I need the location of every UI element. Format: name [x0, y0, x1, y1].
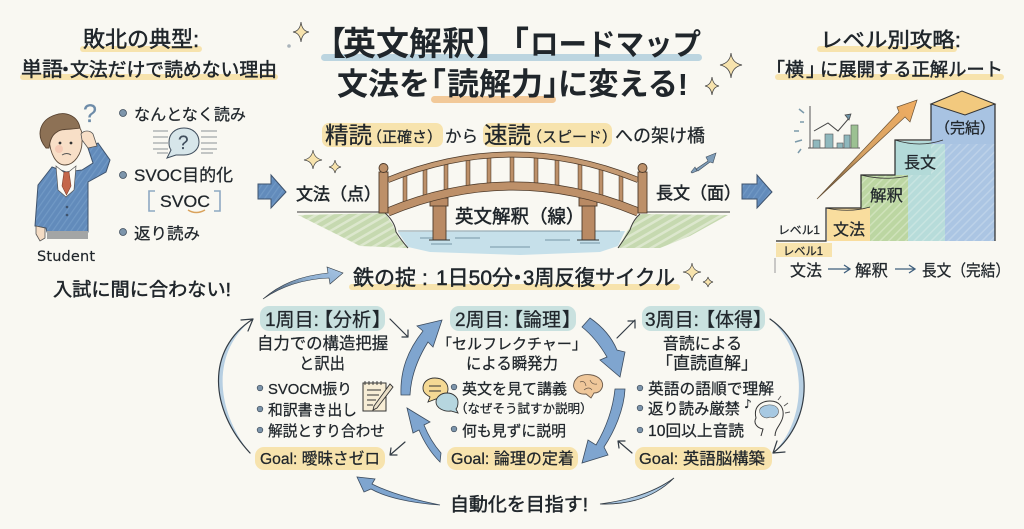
heading: defeat patterns: 文法だけで読めない理由 — [70, 59, 277, 81]
description: round 1 — [257, 335, 388, 373]
icon: music note: ♪ — [744, 397, 752, 411]
bullet: vague reading: なんとなく読み — [134, 106, 246, 124]
arrow: into cycle heading — [263, 267, 343, 299]
title: 英文解釈 — [343, 25, 475, 62]
route: grammar to long passage: 長文（完結） — [922, 262, 1010, 280]
pill: round 2: 2周目: — [455, 310, 509, 331]
title: 」 — [543, 67, 574, 102]
pill: round 2: 論理 — [523, 309, 561, 331]
bullet: back reading: 返り読み — [134, 225, 200, 243]
pill: round 1: 1周目: — [265, 310, 319, 331]
description: round 2: 「セルフレクチャー」 — [437, 336, 587, 353]
water — [398, 231, 625, 255]
pill: round 1: 】 — [372, 309, 391, 331]
title: 「 — [415, 67, 446, 102]
arrow: round 1 to round 2 thin — [390, 319, 408, 337]
bullets: round 2 — [451, 380, 593, 440]
description: round 3: 「直読直解」 — [656, 354, 758, 373]
pill: round 2 — [450, 306, 581, 331]
pill: round 3: 体得 — [715, 309, 753, 331]
subheading: bridge from intensive to speed reading: から — [445, 128, 478, 146]
bullets: round 2: 何も見ずに説明 — [462, 423, 566, 440]
arrow: goal 3 to automation — [600, 478, 674, 504]
label: interpretation step: 解釈 — [870, 187, 903, 205]
title: に変える! — [558, 67, 688, 102]
arrow: rising orange — [817, 100, 917, 199]
arrow: automation to goal 1 — [357, 477, 440, 505]
heading: defeat patterns: 単語 — [21, 58, 63, 81]
route: grammar to long passage: 文法 — [790, 262, 822, 280]
subheading: bridge from intensive to speed reading: 精読 — [325, 122, 372, 148]
pill: goal 1: Goal: 曖昧さゼロ — [260, 450, 380, 468]
bullets: round 1: 和訳書き出し — [268, 402, 357, 419]
heading: level strategy: 横 — [785, 59, 804, 81]
arrow: left panel to bridge — [258, 175, 286, 208]
heading: level strategy: に展開する正解ルート — [820, 59, 1003, 80]
label: level 1 highlighted: レベル1 — [783, 246, 823, 258]
panel: round 2 logic — [423, 306, 603, 470]
arrow: big to goal 2 — [582, 389, 625, 463]
heading: level strategy: 「 — [766, 59, 785, 81]
icon: bridge sparkles — [304, 150, 341, 173]
arrow: big from goal 2 — [407, 408, 441, 462]
arrow: round 3 down to goal 3 — [770, 319, 804, 453]
chart: mini bar chart — [794, 106, 860, 153]
bullet: SVOC as goal: SVOC目的化 — [134, 166, 233, 185]
subheading: bridge from intensive to speed reading: （スピード） — [527, 129, 617, 146]
panel: level strategy — [766, 29, 1010, 280]
arrow: toward goal 1 thin — [390, 442, 405, 455]
rail and deck — [388, 154, 638, 180]
heading: iron rule cycle — [349, 267, 680, 290]
heading: level strategy: 」 — [806, 60, 825, 81]
label: grammar (point): 文法（点） — [296, 185, 381, 204]
label: long passage (plane): 長文（面） — [656, 184, 741, 203]
heading: defeat patterns — [20, 27, 278, 81]
panel: round 3 mastery — [635, 306, 790, 470]
illustration: bridge — [297, 154, 730, 255]
subheading: bridge from intensive to speed reading: への架け橋 — [615, 126, 705, 146]
title: 読解力 — [447, 67, 543, 102]
pill: goal 3: Goal: 英語脳構築 — [639, 450, 765, 468]
title: 「 — [496, 25, 529, 62]
ground line — [297, 211, 730, 213]
panel: defeat patterns — [20, 27, 278, 300]
description: round 1: と訳出 — [299, 355, 345, 373]
icon: question bubble with text lines: ? — [178, 133, 189, 154]
subheading: bridge from intensive to speed reading: 速読 — [484, 122, 531, 148]
bullets: round 2: 英文を見て講義 — [462, 380, 567, 398]
pill: goal 1 — [255, 447, 385, 470]
heading: level strategy — [766, 29, 1004, 81]
icon: SVOC brackets: SVOC — [160, 192, 210, 211]
left bank — [298, 213, 408, 248]
icon: confused student — [35, 114, 110, 241]
route: grammar to long passage: 解釈 — [855, 262, 888, 280]
heading: level strategy: レベル別攻略: — [820, 29, 961, 52]
bullets: round 3: 英語の語順で理解 — [648, 380, 774, 398]
icon: brain — [574, 375, 603, 398]
pill: round 1: 【 — [314, 309, 333, 331]
pill: round 2: 【 — [504, 309, 523, 331]
icon: notepad and pencil — [363, 381, 393, 411]
right bank — [618, 214, 728, 248]
pill: round 3: 】 — [753, 309, 772, 331]
pill: goal 3 — [635, 447, 772, 470]
callout: not in time: 入試に間に合わない! — [53, 279, 231, 300]
label: complete step: （完結） — [935, 120, 995, 137]
title: 文法を — [337, 67, 430, 102]
description: round 3 — [656, 335, 758, 373]
title: 】 — [476, 25, 509, 62]
bullets: round 3: 10回以上音読 — [648, 422, 744, 440]
icon: question mark: ? — [83, 100, 97, 128]
subheading: bridge from intensive to speed reading: （正確さ） — [367, 129, 442, 146]
bullets: round 2: （なぜそう試すか説明） — [455, 401, 593, 416]
pill: round 1 — [260, 306, 391, 331]
balusters — [405, 155, 621, 205]
pill: round 2: 】 — [562, 309, 581, 331]
icon: question bubble with text lines — [153, 128, 217, 158]
label: grammar step: 文法 — [833, 221, 865, 239]
description: round 2: による瞬発力 — [466, 355, 558, 373]
icon: small dart — [691, 153, 716, 173]
arrow: goal 1 back to round 1 — [218, 319, 253, 453]
heading: defeat patterns: ・ — [56, 60, 75, 81]
title: 【 — [313, 25, 346, 62]
heading: iron rule cycle: 1日50分 — [436, 267, 513, 290]
arrow: goal 3 to back thin — [618, 441, 632, 453]
bullets: round 3: 返り読み厳禁 — [648, 400, 740, 418]
bullets: round 1: SVOCM振り — [268, 381, 352, 398]
pill: goal 2 — [447, 447, 578, 470]
label: long passage step: 長文 — [904, 154, 936, 172]
piers — [430, 198, 597, 240]
bullets: round 1: 解説とすり合わせ — [268, 423, 385, 440]
heading: iron rule cycle: 鉄の掟 — [353, 267, 416, 290]
posts — [379, 164, 647, 213]
pill: round 3: 【 — [696, 309, 715, 331]
bullets: round 3 — [637, 380, 774, 440]
title: ロードマップ — [530, 29, 701, 62]
title — [313, 25, 702, 103]
arrow: toward round 3 thin — [617, 320, 635, 338]
icon: chat bubbles — [423, 378, 458, 413]
bullets: round 1 — [257, 381, 385, 440]
label: english interpretation (line): 英文解釈（線） — [455, 206, 585, 227]
heading: iron rule cycle: 3周反復サイクル — [523, 267, 675, 290]
pill: goal 2: Goal: 論理の定着 — [451, 450, 574, 468]
chart: staircase — [776, 91, 995, 241]
panel: round 1 analysis — [255, 306, 393, 470]
description: round 2 — [437, 336, 587, 373]
description: round 3: 音読による — [663, 335, 742, 353]
heading: iron rule cycle: ・ — [507, 267, 528, 290]
pill: round 3 — [642, 306, 772, 331]
heading: iron rule cycle: : — [422, 267, 428, 290]
label: level 1 highlighted — [776, 243, 832, 258]
heading: defeat patterns: 敗北の典型: — [83, 27, 199, 52]
arrow: bridge to level panel — [742, 175, 772, 208]
label: automation goal: 自動化を目指す! — [450, 494, 588, 515]
arrow: big up to round 2 — [401, 320, 442, 395]
subheading: bridge from intensive to speed reading — [322, 122, 705, 148]
arrow: big down from round 2 — [582, 318, 625, 377]
icon: title sparkles — [287, 22, 742, 95]
icon: cycle heading sparkles — [683, 263, 713, 287]
label: level 1: レベル1 — [778, 225, 820, 237]
label: student: Student — [37, 249, 95, 265]
pill: round 1: 分析 — [333, 309, 371, 331]
description: round 1: 自力での構造把握 — [257, 335, 388, 353]
icon: head with brain — [755, 396, 790, 436]
pill: round 3: 3周目: — [645, 310, 699, 331]
route: grammar to long passage — [775, 258, 1010, 280]
icon: SVOC brackets — [149, 191, 220, 212]
